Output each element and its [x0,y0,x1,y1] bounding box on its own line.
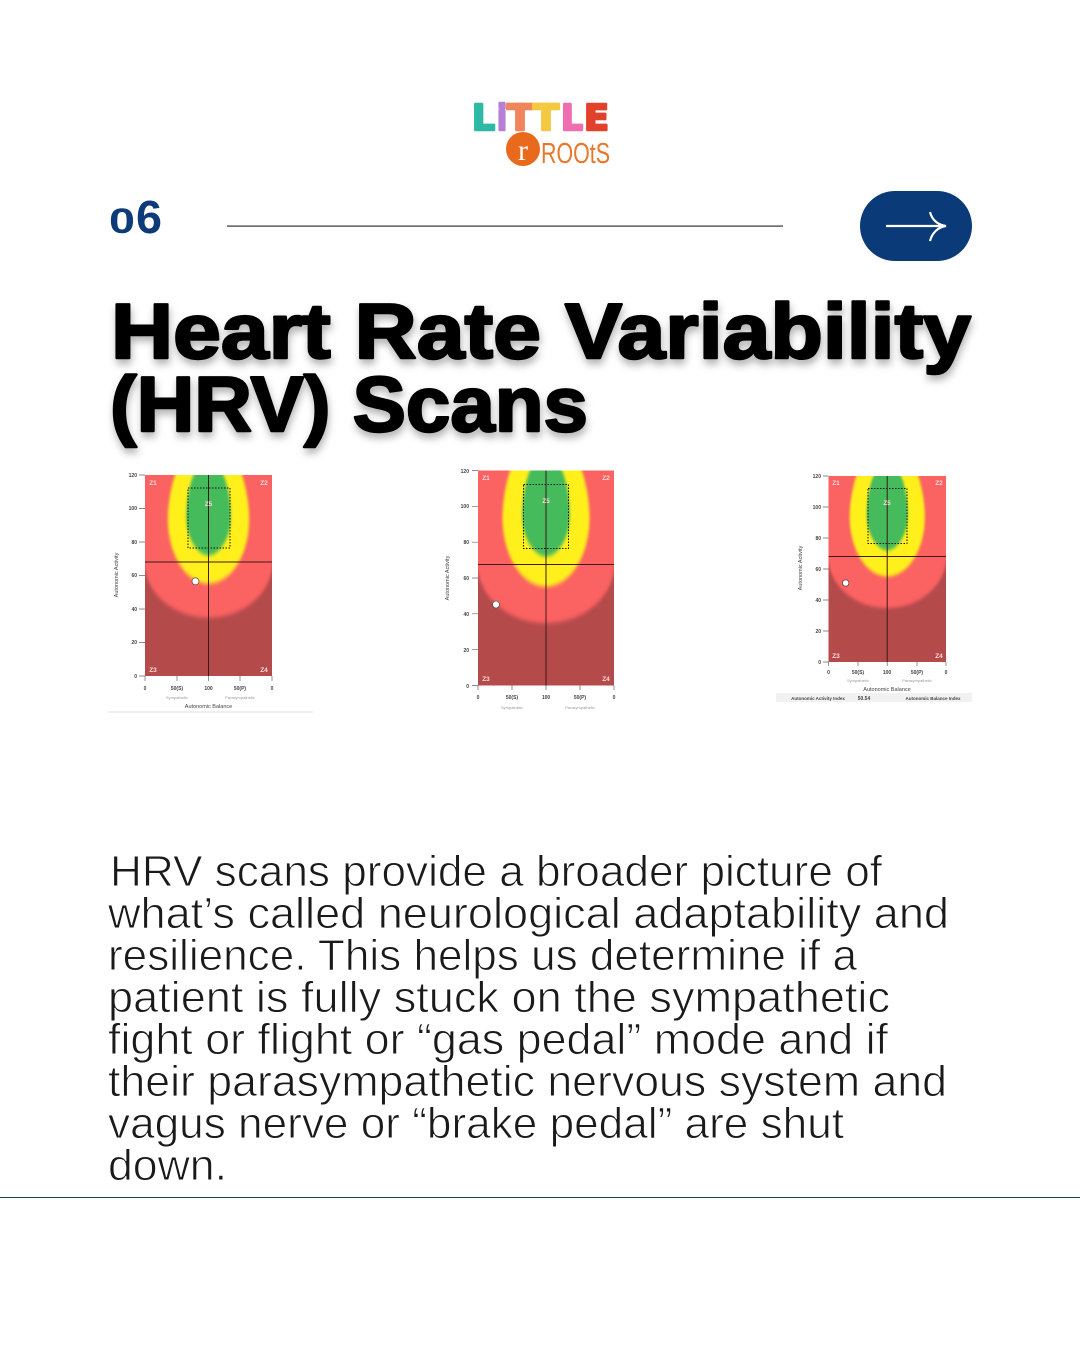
chart: HRV scan 1: Z5 [205,501,213,508]
body text: their parasympathetic nervous system and [108,1057,947,1106]
chart: HRV scan 3: Z5 [883,500,891,507]
chart: HRV scan 1: 120 [129,473,137,479]
chart: HRV scan 1: Z1 [149,480,157,487]
chart: HRV scan 3: Autonomic Activity [798,545,804,590]
chart: HRV scan 3: Z1 [832,480,840,487]
chart: HRV scan 2: 60 [463,576,469,582]
chart: HRV scan 2: 80 [463,540,469,546]
chart: HRV scan 3: 60 [815,567,821,573]
chart: HRV scan 1: Z4 [260,667,268,674]
logo: Little Roots: ROOtS [541,138,610,170]
chart: HRV scan 3: 50(P) [911,670,923,676]
chart: HRV scan 3: Z3 [832,653,840,660]
chart: HRV scan 1: Parasympathetic [225,695,255,700]
chart: HRV scan 2: Z4 [602,676,610,683]
chart: HRV scan 3: 0 [945,670,948,676]
chart: HRV scan 3: 40 [815,598,821,604]
chart: HRV scan 2: Z2 [602,475,610,482]
chart: HRV scan 1: 100 [204,686,213,692]
chart: HRV scan 3: 50(S) [852,670,864,676]
chart: HRV scan 3: Z4 [935,653,943,660]
chart: HRV scan 1: 50(P) [234,686,246,692]
title [110,287,971,448]
chart: HRV scan 3: Sympathetic [847,678,869,683]
chart: HRV scan 2: 100 [461,504,469,510]
body text: fight or flight or “gas pedal” mode and if [108,1015,889,1064]
chart: HRV scan 2: Sympathetic [501,705,523,710]
body text: down. [108,1141,227,1190]
chart: HRV scan 3: 120 [813,474,821,480]
slide number: 0 [109,202,135,241]
chart: HRV scan 3: Autonomic Balance Index [905,696,961,701]
chart: HRV scan 2: 50(S) [506,695,518,701]
chart: HRV scan 3: Autonomic Balance [863,687,911,693]
chart: HRV scan 2: 0 [466,684,469,690]
chart: HRV scan 2 [445,428,628,710]
chart: HRV scan 2: Z5 [542,498,550,505]
chart: HRV scan 3 [776,439,972,702]
chart: HRV scan 1: 0 [134,674,137,680]
logo: Little Roots: L [561,98,583,139]
chart: HRV scan 1: Z3 [149,667,157,674]
logo: Little Roots [472,98,610,170]
body text [107,847,949,1190]
chart: HRV scan 3: 0 [818,660,821,666]
chart: HRV scan 3: 20 [815,629,821,635]
chart: HRV scan 1: 0 [144,686,147,692]
chart: HRV scan 3: 80 [815,536,821,542]
title: (HRV) Scans [110,360,588,448]
chart: HRV scan 1: 0 [271,686,274,692]
logo: Little Roots: L [472,98,495,139]
chart: HRV scan 2: 40 [463,612,469,618]
logo: Little Roots: r [518,134,528,167]
body text: resilience. This helps us determine if a [108,931,858,980]
chart: HRV scan 2: Autonomic Activity [445,555,451,600]
logo: Little Roots: i [497,98,507,139]
chart: HRV scan 1: 50(S) [171,686,183,692]
body text: what’s called neurological adaptability and [107,889,949,938]
logo: Little Roots: E [584,98,609,139]
chart: HRV scan 3: 50.54 [858,696,870,702]
chart: HRV scan 1: 20 [131,640,137,646]
chart: HRV scan 1 [108,435,313,713]
chart: HRV scan 1: 80 [131,540,137,546]
chart: HRV scan 2: 0 [477,695,480,701]
chart: HRV scan 3: Z2 [935,480,943,487]
chart: HRV scan 2: 20 [463,648,469,654]
chart: HRV scan 1: Autonomic Activity [114,552,120,597]
body text: patient is fully stuck on the sympathetic [108,973,890,1022]
chart: HRV scan 1: 40 [131,607,137,613]
title: Heart Rate Variability [111,287,971,375]
chart: HRV scan 2: Parasympathetic [565,705,595,710]
chart: HRV scan 2: 100 [542,695,550,701]
arrow button [860,191,972,261]
chart: HRV scan 3: 0 [827,670,830,676]
chart: HRV scan 2: Z3 [482,676,490,683]
body text: vagus nerve or “brake pedal” are shut [108,1099,844,1148]
chart: HRV scan 1: 100 [129,506,137,512]
chart: HRV scan 1: 60 [131,573,137,579]
chart: HRV scan 3: 100 [883,670,891,676]
footer rule [0,1197,1080,1198]
logo: Little Roots: T [533,98,559,139]
chart: HRV scan 2: 120 [461,469,469,475]
logo: Little Roots: T [507,98,533,139]
chart: HRV scan 1: Sympathetic [166,695,188,700]
chart: HRV scan 1: Z2 [260,480,268,487]
chart: HRV scan 3: Autonomic Activity Index [791,696,845,701]
body text: HRV scans provide a broader picture of [110,847,883,896]
chart: HRV scan 2: 0 [613,695,616,701]
chart: HRV scan 3: Parasympathetic [902,678,932,683]
header rule [227,226,783,227]
chart: HRV scan 2: 50(P) [574,695,586,701]
chart: HRV scan 3: 100 [813,505,821,511]
chart: HRV scan 1: Autonomic Balance [185,704,232,710]
slide number [109,191,162,243]
chart: HRV scan 2: Z1 [482,475,490,482]
slide number: 6 [136,191,162,243]
